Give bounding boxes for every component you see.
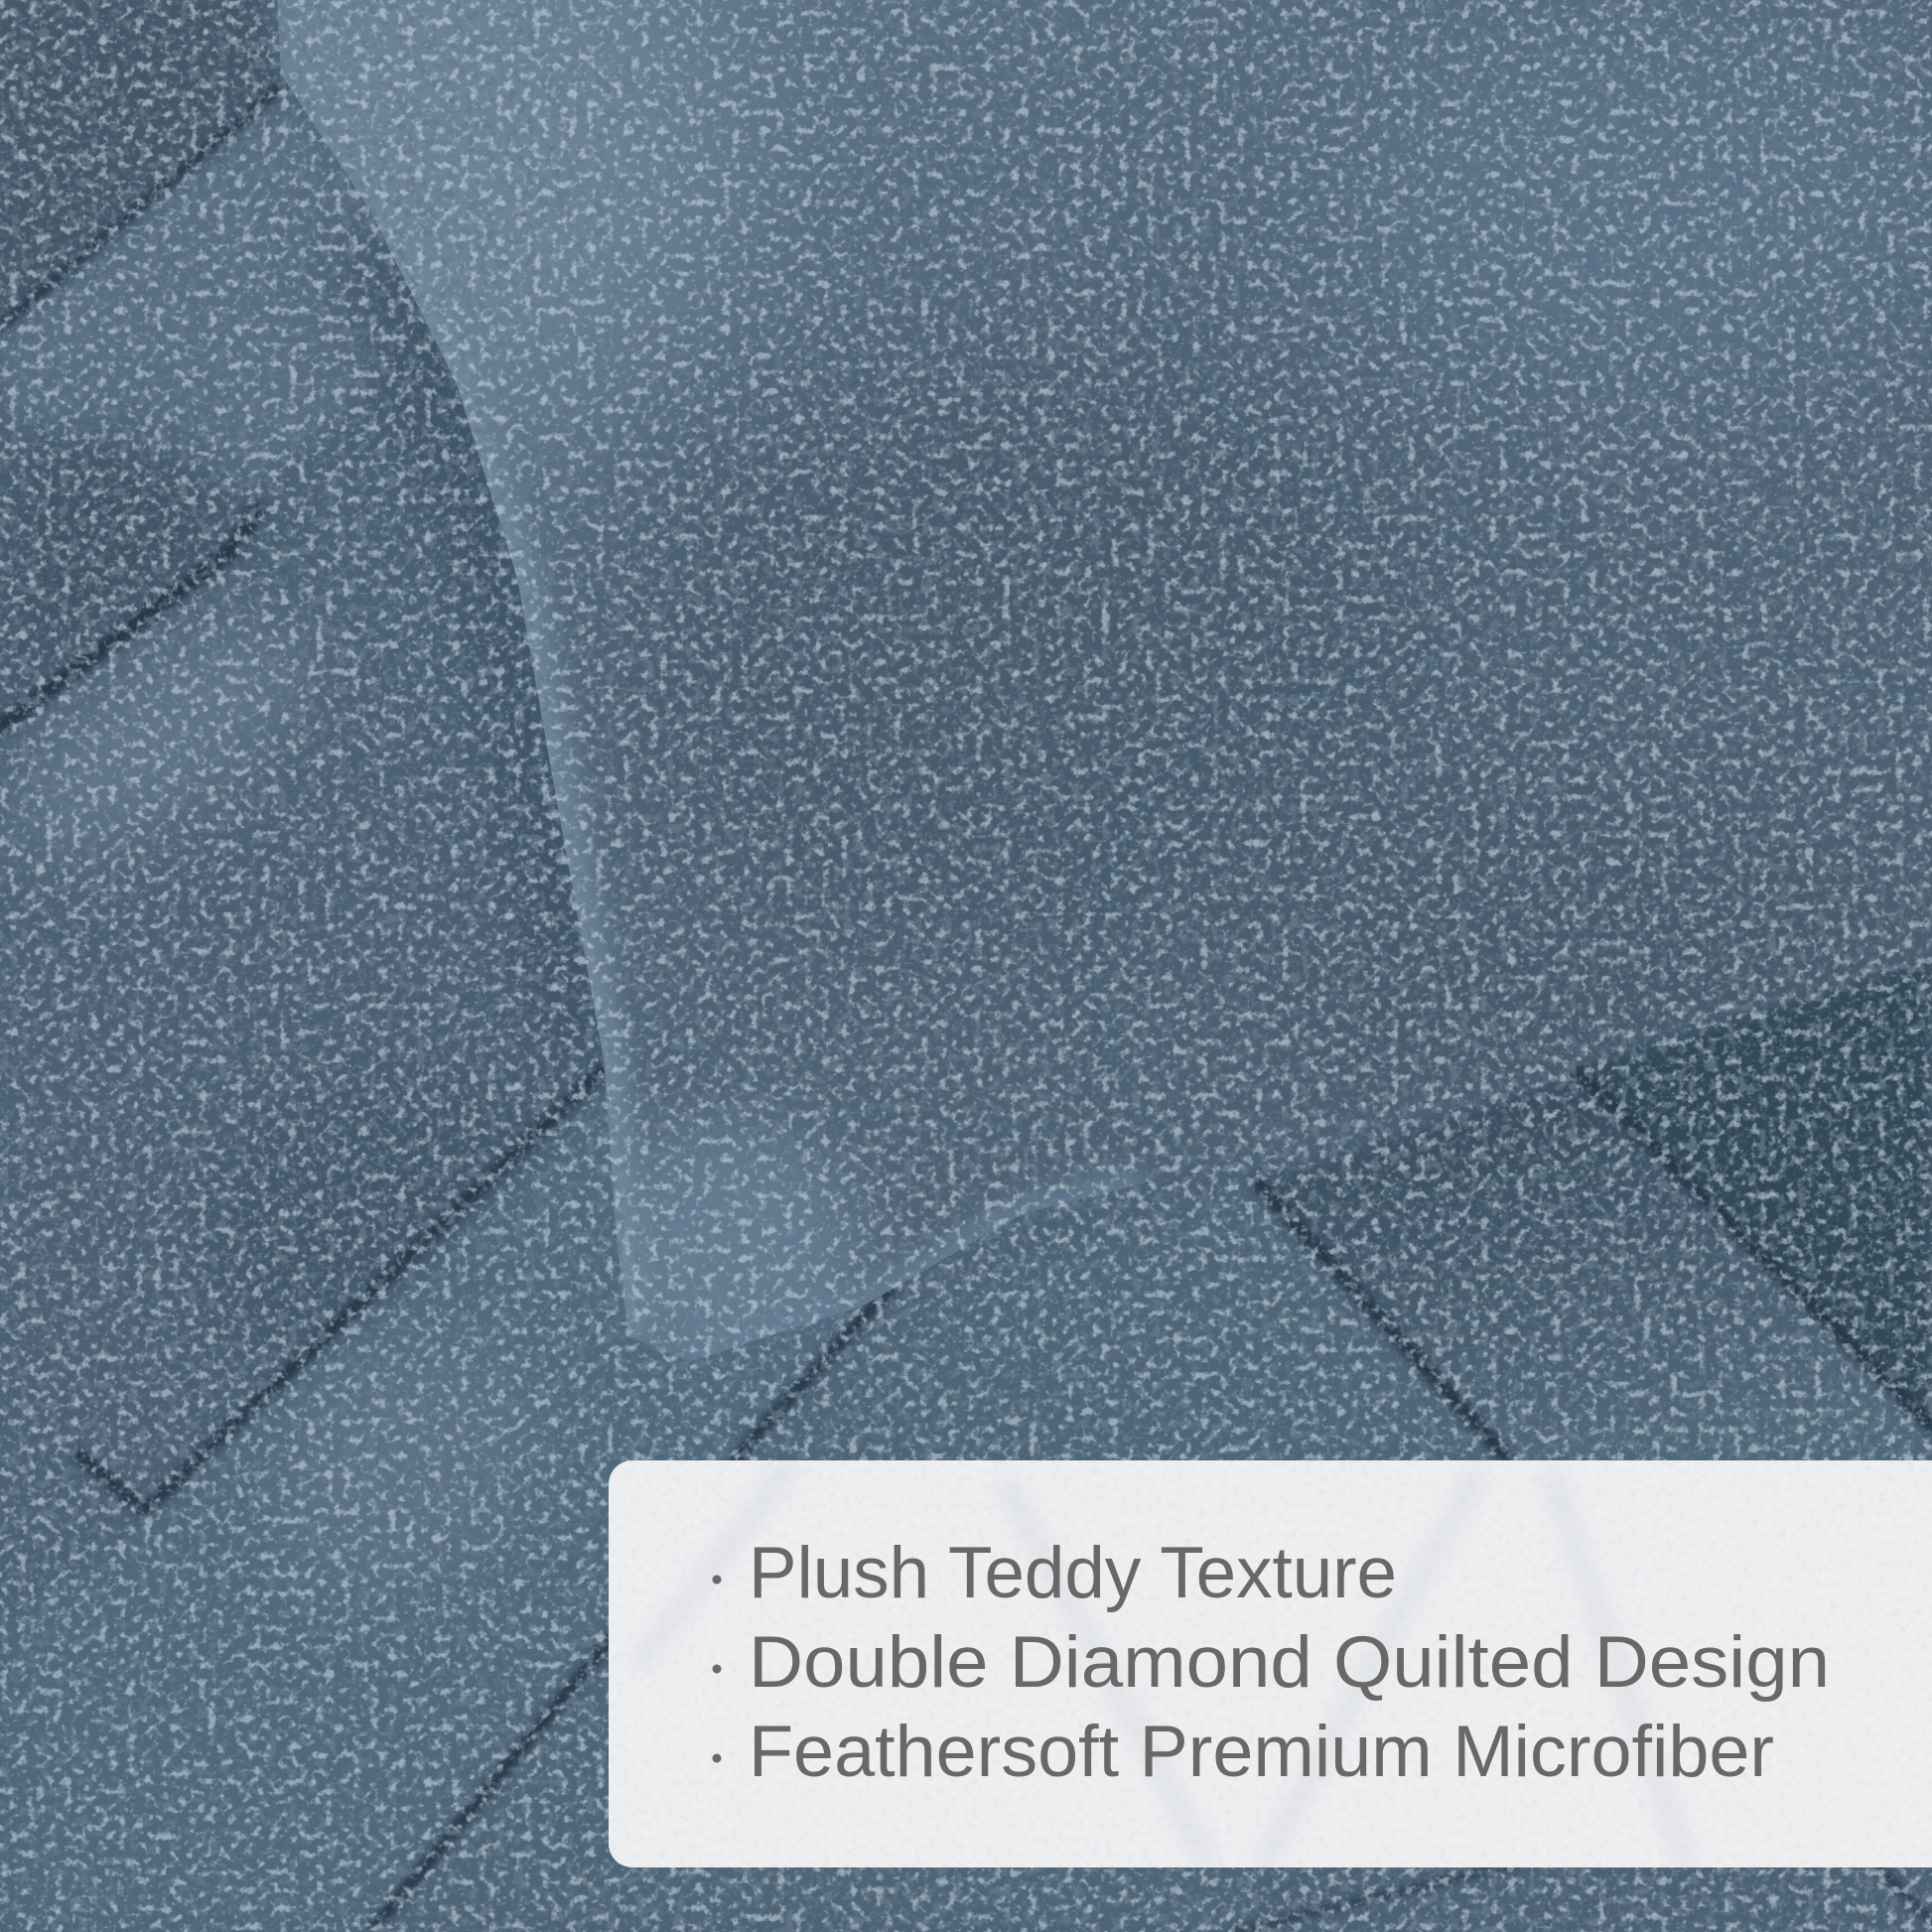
item: plush teddy texture: Plush Teddy Texture <box>749 1533 1397 1613</box>
bullet list <box>713 1533 1830 1792</box>
quilted band: upper left light <box>0 98 419 492</box>
pillow highlight: top left <box>278 0 759 445</box>
pillow highlight: left edge <box>369 209 628 1337</box>
pillow highlight: top right <box>1294 0 1932 394</box>
quilted band: top left <box>0 0 281 327</box>
quilted block: left centre <box>0 567 604 1509</box>
quilted bands: bottom right <box>1258 1072 1932 1466</box>
panel quilt shading <box>609 1459 1932 1867</box>
pillow <box>277 0 1932 1361</box>
pillow highlight: bottom edge <box>690 1182 1146 1361</box>
quilted bands: bottom left <box>0 1090 888 1932</box>
feature panel <box>609 1459 1932 1867</box>
item: feathersoft premium microfiber: Feathersoft Premium Microfiber <box>749 1712 1774 1792</box>
panel background <box>609 1460 1932 1867</box>
pillow highlight: lower corner <box>592 1121 863 1392</box>
pillow shading: lower right <box>1232 801 1932 1121</box>
quilted band: left dark <box>0 431 252 727</box>
pillow shading: centre <box>606 370 1263 844</box>
item: double diamond quilted design: Double Diamond Quilted Design <box>749 1622 1830 1703</box>
shadow cast by pillow <box>357 234 589 1059</box>
